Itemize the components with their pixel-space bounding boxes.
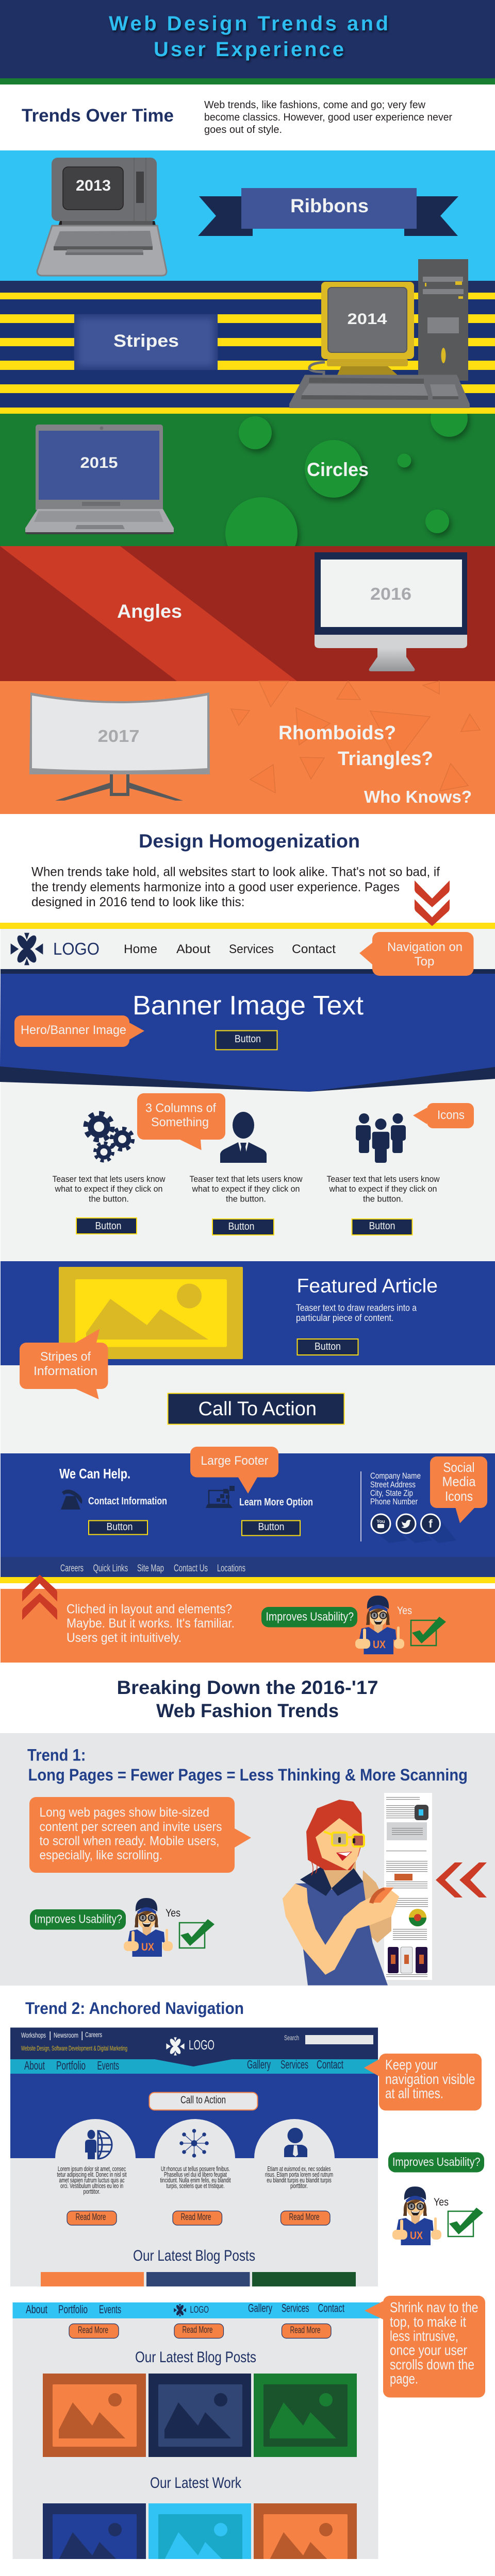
callout: keep navigation visible — [364, 2054, 482, 2110]
callout: keep navigation visible: at all times. — [385, 2086, 443, 2101]
panel: large footer mock — [1, 1453, 495, 1577]
footer links: Locations — [217, 1563, 245, 1574]
read more buttons: Read More — [75, 2212, 106, 2222]
panel: rhomboids triangles 2017 — [0, 681, 495, 814]
panel: anchored navigation mock site 1 — [10, 2028, 378, 2286]
callout: hero banner image: Hero/Banner Image — [21, 1023, 126, 1037]
text: column 3 lorem: risus. Etiam porta lorem sed rutrum — [265, 2171, 333, 2178]
callout: long web pages: content per screen and invite users — [39, 1820, 222, 1834]
button column 2 — [212, 1219, 274, 1235]
icon: 2013 laptop — [37, 158, 167, 276]
text: teaser column 2: Teaser text that lets users know — [190, 1174, 303, 1184]
navigation: Services — [280, 2058, 308, 2071]
button column 3 — [352, 1219, 412, 1235]
featured teaser: Teaser text to draw readers into a — [296, 1302, 417, 1313]
callout: stripes of information: Stripes of — [40, 1350, 91, 1364]
button learn more: Button — [258, 1521, 285, 1533]
text: column 1 lorem: porttitor. — [84, 2188, 100, 2195]
navigation: Gallery — [247, 2058, 271, 2071]
callout: shrink nav: scrolls down the — [390, 2357, 474, 2372]
read more buttons: Read More — [289, 2212, 320, 2222]
icon: pixel laptop — [206, 1486, 235, 1508]
call to action button: Call to Action — [180, 2095, 226, 2106]
blog heading: Our Latest Blog Posts — [135, 2349, 256, 2366]
read more buttons: Read More — [183, 2325, 212, 2335]
navigation: About — [26, 2303, 47, 2316]
callout: long web pages: Long web pages show bite-sized — [39, 1805, 209, 1820]
heading: design homogenization: Design Homogenization — [139, 831, 360, 852]
badge: improves usability yes: UX — [373, 1639, 386, 1651]
stripes label: Stripes — [113, 331, 179, 351]
callout: 3 columns of something — [137, 1093, 225, 1150]
text: homogenization intro: designed in 2016 tend to look like this: — [31, 895, 244, 909]
callout: stripes of information — [20, 1329, 108, 1399]
badge: improves usability yes — [30, 1898, 214, 1957]
navigation: Contact — [317, 2058, 343, 2071]
text: teaser column 3: the button. — [363, 1194, 403, 1204]
navigation: Contact — [292, 942, 336, 956]
call to action button — [150, 2093, 258, 2110]
callout: navigation on top: Navigation on — [387, 940, 463, 954]
text: cliched: Cliched in layout and elements? — [67, 1602, 232, 1617]
arrow: down chevrons — [415, 880, 450, 926]
callout: large footer — [190, 1447, 278, 1494]
text: column 2 lorem: turpis, sceleris que et tristique. — [166, 2182, 225, 2190]
utility links: Workshops — [21, 2031, 46, 2039]
banner heading: Banner Image Text — [133, 991, 364, 1021]
text: cliched — [67, 1602, 235, 1645]
read more buttons: Read More — [180, 2212, 211, 2222]
heading: trends over time: Trends Over Time — [22, 106, 174, 126]
text: teaser column 2: what to expect if they click on — [192, 1184, 300, 1194]
icon: 2015 laptop: 2015 — [80, 454, 118, 471]
callout: 3 columns of something: Something — [151, 1115, 209, 1129]
callout: keep navigation visible: navigation visible — [385, 2071, 475, 2087]
callout: shrink nav: top, to make it — [390, 2314, 466, 2330]
button — [216, 1030, 277, 1050]
work heading: Our Latest Work — [150, 2475, 242, 2492]
tagline: Website Design, Software Development & Digital Marketing — [21, 2044, 127, 2052]
icons: social media: f — [428, 1517, 433, 1530]
call to action button: Call To Action — [198, 1398, 317, 1420]
button column 1 — [76, 1218, 137, 1234]
navigation: Home — [124, 942, 157, 956]
navigation — [26, 2302, 344, 2316]
panel: typical page mockup top — [0, 923, 495, 974]
navigation: Portfolio — [56, 2059, 86, 2072]
button column 2: Button — [228, 1221, 255, 1232]
button — [297, 1339, 358, 1355]
title: Web Design Trends and — [109, 12, 388, 35]
arrow: left chevrons — [436, 1862, 487, 1897]
text: trends intro — [204, 99, 452, 135]
text: column 3 lorem: Etiam at euismod ex, nec sodales — [267, 2165, 331, 2173]
read more buttons: Read More — [78, 2325, 108, 2335]
text: teaser column 2: the button. — [226, 1194, 266, 1204]
callout: shrink nav — [365, 2296, 485, 2398]
featured heading: Featured Article — [297, 1276, 438, 1297]
icon: 2013 laptop: 2013 — [76, 177, 111, 194]
text: column 2 lorem: Ut rhoncus ut tellus posuere finibus. — [161, 2165, 230, 2173]
footer links — [60, 1563, 245, 1574]
panel: stripes 2014 — [0, 259, 495, 414]
text: column 3 lorem: eu blandit turpis eu blandit turpis — [267, 2176, 332, 2184]
decorative triangles — [231, 681, 480, 793]
icon: network nodes — [179, 2129, 209, 2158]
navigation: About — [176, 942, 210, 956]
utility links: Careers — [85, 2030, 102, 2039]
badge: improves usability yes: Yes — [166, 1907, 180, 1919]
text: cliched: Maybe. But it works. It's familiar. — [67, 1616, 235, 1631]
button learn more — [242, 1521, 300, 1535]
text: teaser column 3 — [327, 1174, 440, 1204]
panel: trend 1 long pages — [0, 1733, 495, 1986]
footer links: Quick Links — [93, 1563, 128, 1574]
icon: 2015 laptop — [25, 425, 174, 534]
ribbon: Ribbons — [290, 195, 369, 216]
callout: social media icons: Media — [442, 1473, 476, 1489]
callout: navigation on top — [359, 932, 473, 976]
blog heading: Our Latest Blog Posts — [133, 2247, 255, 2264]
arches — [55, 2119, 335, 2158]
navigation: Portfolio — [58, 2303, 88, 2316]
learn more option: Learn More Option — [239, 1497, 313, 1508]
ribbon — [198, 188, 458, 236]
icon: logo — [166, 2037, 185, 2056]
button column 1: Button — [95, 1221, 122, 1232]
image placeholder — [59, 1267, 243, 1359]
panel: hero banner mock — [0, 974, 495, 1261]
contact info: Contact Information — [88, 1496, 167, 1507]
blog tile tops — [41, 2272, 356, 2286]
navigation: Events — [99, 2303, 121, 2316]
navigation: Services — [282, 2302, 309, 2314]
heading: breaking down the trends — [117, 1677, 378, 1721]
navigation: About — [24, 2059, 45, 2072]
text: cliched: Users get it intuitively. — [67, 1631, 182, 1645]
logo text: LOGO — [190, 2304, 209, 2315]
icon: man and globe — [85, 2130, 112, 2159]
icon: logo flower — [11, 933, 43, 965]
title banner — [0, 0, 495, 84]
search — [284, 2033, 373, 2044]
stripes label — [74, 314, 218, 370]
panel: featured article stripe — [1, 1261, 495, 1365]
text: trends intro: goes out of style. — [204, 124, 282, 135]
callout: social media icons: Icons — [445, 1488, 473, 1504]
icon: 2017 curved monitor: 2017 — [98, 726, 139, 745]
icon: business person — [220, 1112, 267, 1163]
text: homogenization intro: the trendy elements harmonize into a good user experience. Pages — [31, 880, 400, 894]
badge: improves usability yes: Yes — [397, 1605, 412, 1617]
trend 1 heading — [27, 1745, 468, 1784]
decorative circles — [225, 414, 472, 546]
icon: 2017 curved monitor — [29, 692, 210, 801]
footer links: Contact Us — [174, 1563, 208, 1574]
navigation — [124, 942, 336, 956]
heading: breaking down the trends: Breaking Down the 2016-'17 — [117, 1677, 378, 1698]
text: teaser column 1: Teaser text that lets users know — [53, 1174, 166, 1184]
title — [109, 12, 388, 61]
text: teaser column 3: what to expect if they click on — [329, 1184, 437, 1194]
icon: telephone — [61, 1489, 82, 1510]
text: column 3 lorem: porttitor. — [290, 2182, 308, 2190]
logo text: LOGO — [53, 939, 100, 958]
panel: cliched layout verdict — [0, 1577, 495, 1663]
callout: keep navigation visible: Keep your — [385, 2057, 437, 2073]
arrow: up chevrons — [22, 1574, 57, 1620]
angles label: Angles — [117, 601, 182, 622]
circles label: Circles — [307, 459, 369, 480]
text: column 1 lorem — [57, 2165, 127, 2195]
text: homogenization intro: When trends take hold, all websites start to look alike. That's not so bad, if — [31, 865, 440, 879]
callout: long web pages — [29, 1797, 251, 1873]
text: homogenization intro — [31, 865, 440, 909]
badge: improves usability yes: Improves Usability? — [392, 2155, 481, 2168]
icons: social media — [371, 1514, 456, 1543]
blog image tiles — [43, 2374, 357, 2457]
button: Button — [315, 1341, 341, 1352]
callout: long web pages: especially, like scrolling. — [39, 1848, 162, 1862]
callout: large footer: Large Footer — [201, 1454, 268, 1468]
callout: shrink nav: page. — [390, 2371, 418, 2386]
navigation — [24, 2058, 343, 2072]
title: User Experience — [154, 38, 344, 61]
navigation: Contact — [318, 2302, 344, 2314]
badge: improves usability yes: Yes — [434, 2196, 449, 2208]
call to action button — [168, 1393, 344, 1424]
icon: person with tie — [284, 2128, 307, 2157]
callout: long web pages: to scroll when ready. Mobile users, — [39, 1834, 220, 1849]
text: column 2 lorem: tincidunt. Nulla enim felis, eu blandit — [160, 2176, 231, 2184]
panel: circles 2015 — [0, 414, 495, 546]
featured teaser — [296, 1302, 417, 1323]
callout: shrink nav: Shrink nav to the — [390, 2299, 478, 2315]
panel: angles 2016 — [0, 546, 495, 681]
footer links: Site Map — [137, 1563, 164, 1574]
work image tiles — [43, 2503, 357, 2559]
navigation: Events — [97, 2059, 119, 2072]
badge: improves usability yes: Improves Usability? — [266, 1609, 354, 1623]
text: teaser column 2 — [190, 1174, 303, 1204]
text: rhomboids: Rhomboids? — [278, 722, 396, 744]
read more buttons — [69, 2324, 331, 2338]
company address — [370, 1471, 421, 1506]
read more buttons — [67, 2211, 330, 2225]
icons: social media: You — [376, 1519, 385, 1524]
utility links: Newsroom — [54, 2031, 78, 2039]
callout: icons — [413, 1103, 474, 1128]
navigation: Gallery — [248, 2302, 272, 2314]
text: who knows: Who Knows? — [364, 787, 472, 806]
text: triangles: Triangles? — [338, 748, 433, 770]
button contact — [89, 1521, 147, 1534]
footer heading: We Can Help. — [59, 1466, 130, 1482]
button column 3: Button — [369, 1221, 395, 1232]
badge: improves usability yes: UX — [141, 1941, 154, 1953]
callout: 3 columns of something: 3 Columns of — [145, 1101, 216, 1115]
callout: icons: Icons — [437, 1108, 465, 1122]
text: column 1 lorem: tetur adipiscing elit. Donec in nisl sit — [57, 2171, 127, 2178]
icon: small logo — [174, 2304, 186, 2316]
icon: 2016 monitor — [315, 552, 467, 671]
company address: Company Name — [370, 1471, 421, 1481]
illustration: long web page screenshot — [384, 1793, 432, 1980]
text: teaser column 3: Teaser text that lets users know — [327, 1174, 440, 1184]
badge: improves usability yes: Improves Usability? — [34, 1912, 122, 1926]
text: teaser column 1 — [53, 1174, 166, 1204]
heading: trend 2 anchored navigation: Trend 2: Anchored Navigation — [25, 1999, 244, 2018]
text: column 1 lorem: amet sapien rutrum luctus quis ac — [59, 2176, 125, 2184]
text: teaser column 1: the button. — [89, 1194, 129, 1204]
callout: shrink nav: once your user — [390, 2342, 467, 2358]
logo text: LOGO — [189, 2037, 214, 2053]
panel: call to action stripe — [1, 1365, 495, 1453]
callout: shrink nav: less intrusive, — [390, 2328, 458, 2344]
callout: social media icons: Social — [443, 1460, 474, 1475]
company address: Phone Number — [370, 1497, 418, 1506]
footer links: Careers — [60, 1563, 84, 1574]
icon: 2016 monitor: 2016 — [370, 584, 411, 603]
badge: improves usability yes — [261, 1596, 446, 1654]
icon: gears — [86, 1113, 133, 1161]
text: column 1 lorem: Lorem ipsum dolor sit amet, consec — [58, 2165, 126, 2173]
button contact: Button — [106, 1521, 133, 1533]
panel: ribbons 2013 — [0, 150, 495, 281]
icon: group of people — [356, 1113, 406, 1163]
text: trends intro: become classics. However, good user experience never — [204, 112, 452, 123]
company address: City, State Zip — [370, 1488, 413, 1498]
icon: 2014 desktop computer — [289, 259, 470, 408]
callout: stripes of information: Information — [34, 1364, 97, 1378]
heading: breaking down the trends: Web Fashion Trends — [156, 1700, 339, 1721]
icon: 2014 desktop computer: 2014 — [348, 311, 387, 328]
utility links — [21, 2030, 102, 2040]
callout: hero banner image — [14, 1015, 144, 1047]
panel: anchored navigation mock site 2 — [12, 2302, 380, 2576]
trend 1 heading: Trend 1: — [27, 1745, 86, 1764]
read more buttons: Read More — [290, 2325, 321, 2335]
featured teaser: particular piece of content. — [296, 1313, 394, 1323]
text: column 2 lorem — [160, 2165, 231, 2190]
navigation: Services — [229, 942, 274, 956]
badge: improves usability yes: UX — [410, 2230, 423, 2242]
text: column 3 lorem — [265, 2165, 333, 2190]
callout: social media icons — [430, 1456, 487, 1523]
text: column 2 lorem: Phasellus vel dui id libero feugiat — [164, 2171, 227, 2178]
text: trends intro: Web trends, like fashions, come and go; very few — [204, 99, 426, 111]
text: column 1 lorem: orci. Vestibulum ultrices eu leo in — [60, 2182, 123, 2190]
badge: improves usability yes — [388, 2153, 484, 2245]
callout: navigation on top: Top — [415, 955, 434, 969]
button: Button — [235, 1033, 261, 1045]
search: Search — [284, 2033, 299, 2042]
company address: Street Address — [370, 1480, 416, 1489]
text: teaser column 1: what to expect if they click on — [55, 1184, 163, 1194]
illustration: woman with phone — [283, 1800, 399, 1986]
